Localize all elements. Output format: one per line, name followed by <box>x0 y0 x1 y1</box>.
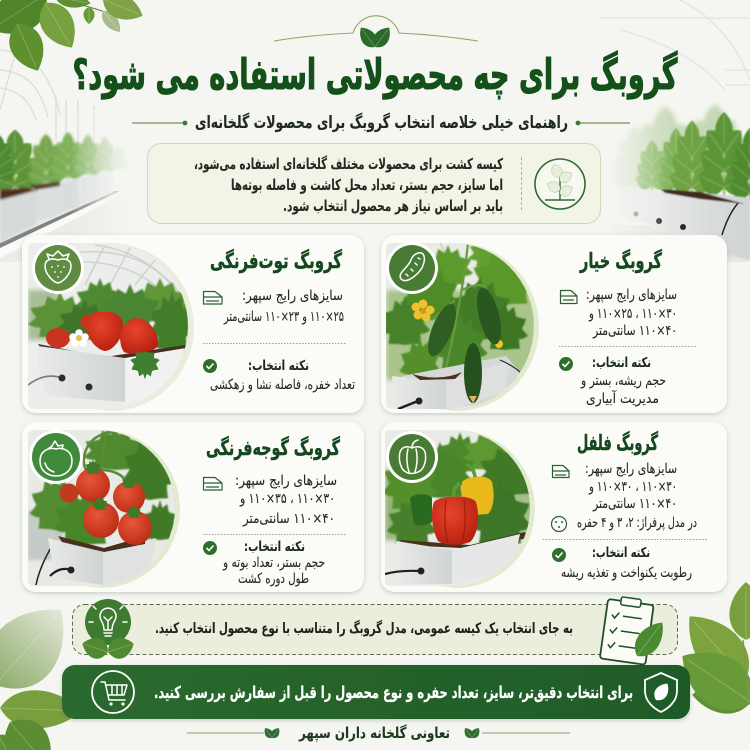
bottom-left corner leaves <box>0 588 86 750</box>
background: right greenhouse <box>600 0 750 262</box>
top-left corner leaves <box>0 0 147 77</box>
icon: bag size <box>560 290 577 304</box>
callout: dashed advice <box>72 595 678 665</box>
footer: cooperative name <box>187 724 570 743</box>
selection note <box>210 358 355 393</box>
sizes text: ۳۰×۱۱۰ ، ۳۰×۱۱۰ و <box>588 479 677 495</box>
selection note: طول دوره کشت <box>238 571 309 587</box>
icon: pepper badge <box>386 431 438 483</box>
icon: check <box>552 548 566 562</box>
selection note: حجم بستر، تعداد بوته و <box>222 555 325 571</box>
selection note <box>222 539 325 587</box>
background: left greenhouse <box>0 50 135 262</box>
sizes text: سایزهای رایج سپهر: <box>585 461 677 477</box>
bottom-right corner leaves <box>668 582 750 724</box>
icon: cart <box>92 671 134 713</box>
icon: strawberry badge <box>32 242 84 294</box>
sizes text <box>235 473 337 527</box>
sizes text: ۴۰×۱۱۰ سانتی‌متر <box>242 511 335 527</box>
icon: clipboard checklist <box>600 595 671 665</box>
intro text: کیسه کشت برای محصولات مختلف گلخانه‌ای استفاده می‌شود، <box>194 155 503 173</box>
panel: cucumber grow bag: گروبگ خیار <box>579 248 663 273</box>
selection note: نکته انتخاب: <box>244 539 305 555</box>
photo: cucumber plant <box>386 243 534 409</box>
icon: light bulb <box>79 599 137 662</box>
panel: pepper grow bag: گروبگ فلفل <box>577 430 658 455</box>
selection note <box>561 545 692 581</box>
selection note <box>580 355 666 407</box>
selection note: تعداد خفره، فاصله نشا و زهکشی <box>210 377 355 393</box>
selection note: نکته انتخاب: <box>248 358 309 374</box>
icon: check <box>203 359 217 373</box>
intro text: اما سایز، حجم بستر، تعداد محل کاشت و فاصله بوته‌ها <box>231 176 503 194</box>
sizes text <box>223 288 344 325</box>
icon: bag size <box>204 292 222 304</box>
icon: bag size <box>552 466 569 478</box>
icon: seedling <box>535 159 585 209</box>
sizes text <box>577 461 697 531</box>
yellow flower <box>412 300 434 322</box>
photo: strawberry plant <box>28 243 195 409</box>
panel: tomato grow bag <box>22 422 364 592</box>
panel: strawberry grow bag: گروبگ توت‌فرنگی <box>210 248 343 273</box>
icon: cucumber badge <box>386 242 438 294</box>
top ornament: leaf emblem <box>274 16 478 51</box>
photo: tomato plant <box>28 426 178 586</box>
intro text: باید بر اساس نیاز هر محصول انتخاب شود. <box>283 197 503 215</box>
selection note: مدیریت آبیاری <box>586 390 659 407</box>
sizes text: ۳۰×۱۱۰ ، ۳۵×۱۱۰ و <box>239 491 335 507</box>
sizes text: سایزهای رایج سپهر: <box>242 288 343 304</box>
sizes text: ۴۰×۱۱۰ سانتی‌متر <box>592 496 677 512</box>
panel: tomato grow bag: گروبگ گوجه‌فرنگی <box>206 435 341 460</box>
panel: strawberry grow bag <box>22 235 364 413</box>
selection note: نکته انتخاب: <box>592 545 650 561</box>
sizes text: ۲۵×۱۱۰ و ۲۳×۱۱۰ سانتی‌متر <box>223 309 344 325</box>
selection note: رطوبت یکنواخت و تغذیه ریشه <box>561 565 692 581</box>
icon: check <box>559 357 573 371</box>
callout: dashed advice: به جای انتخاب یک کیسه عمومی، مدل گروبگ را متناسب با نوع محصول انتخاب کنید. <box>155 619 573 637</box>
sizes text: سایزهای رایج سپهر: <box>235 473 337 489</box>
sizes text: ۳۰×۱۱۰ ، ۲۵×۱۱۰ و <box>588 306 677 322</box>
selection note: نکته انتخاب: <box>592 355 651 371</box>
icon: tomato badge <box>29 430 83 484</box>
photo: pepper plant <box>382 430 542 586</box>
sizes text: ۴۰×۱۱۰ سانتی‌متر <box>592 323 677 339</box>
icon: holes <box>552 516 566 532</box>
icon: bag size <box>204 478 222 490</box>
panel: intro <box>148 144 600 224</box>
sizes text <box>586 287 677 339</box>
panel: cucumber grow bag <box>380 234 727 413</box>
sizes text: در مدل پرفراژ: ۲، ۳ و ۴ حفره <box>577 515 697 531</box>
sizes text: سایزهای رایج سپهر: <box>586 287 677 303</box>
icon: check <box>203 541 217 555</box>
panel: pepper grow bag <box>381 422 727 592</box>
subtitle: راهنمای خیلی خلاصه انتخاب گروبگ برای محصولات گلخانه‌ای <box>195 112 568 133</box>
icon: shield leaf <box>645 673 677 712</box>
footer: cooperative name: تعاونی گلخانه داران سپهر <box>298 724 450 743</box>
banner: order advice <box>62 665 690 719</box>
selection note: حجم ریشه، بستر و <box>580 373 666 389</box>
intro text <box>194 155 503 215</box>
